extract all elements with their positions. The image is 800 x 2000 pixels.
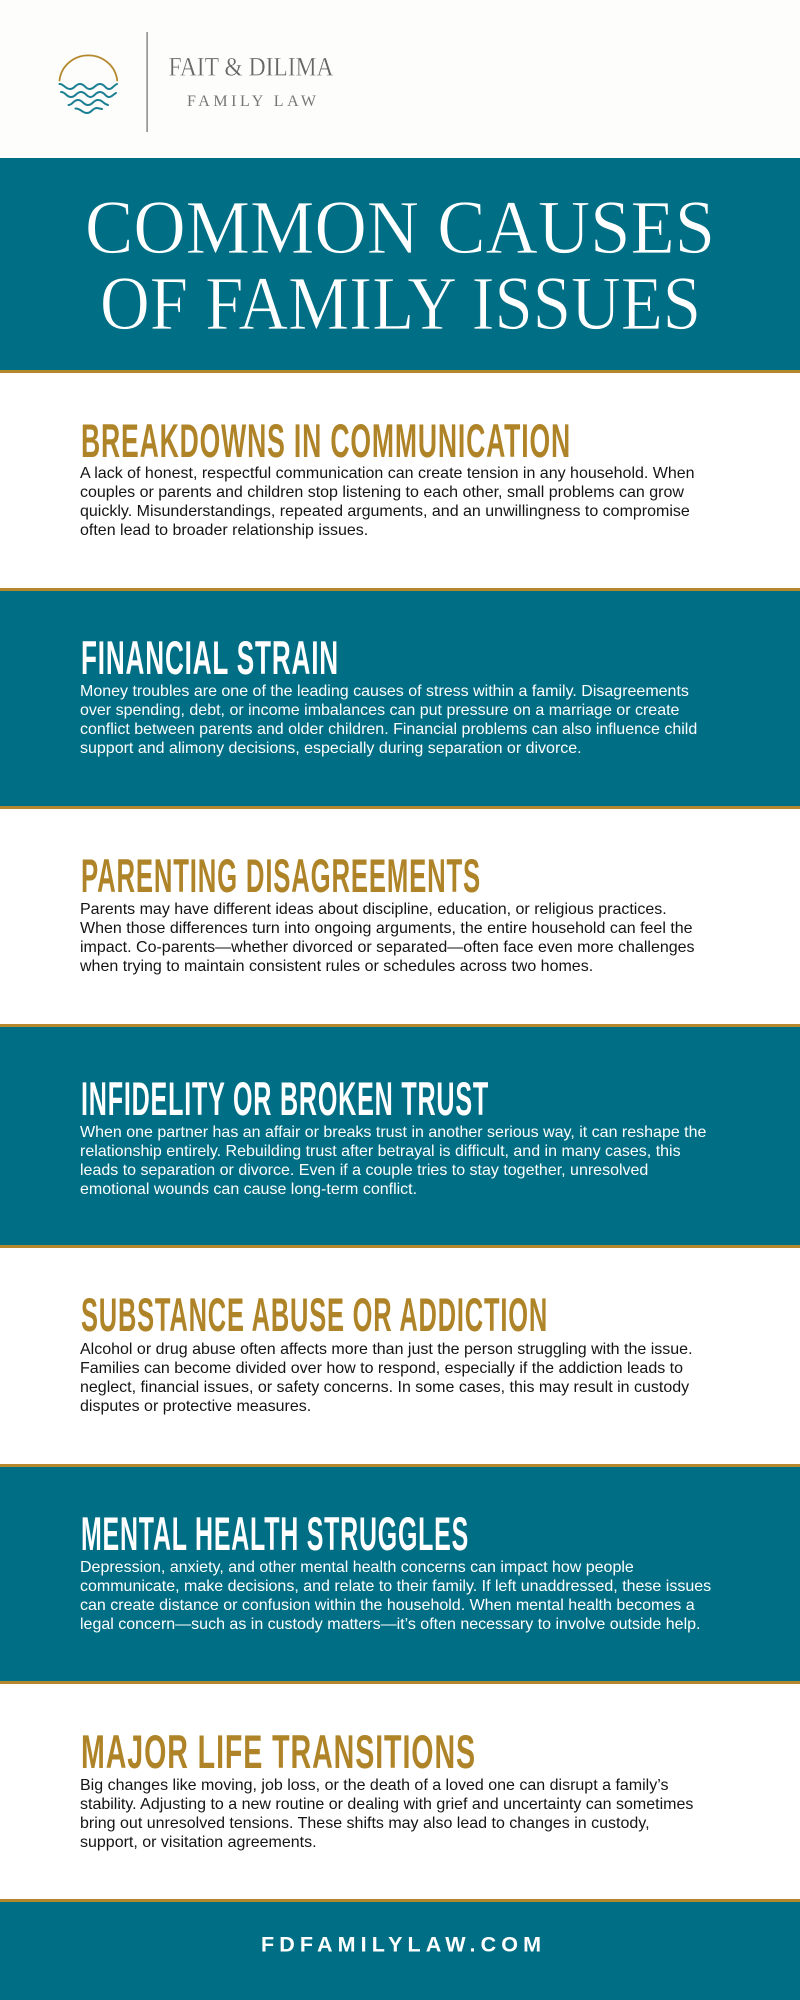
panel: infidelity or broken trust [0,1027,800,1248]
text block: Depression, anxiety, and other mental health concerns can impact how people [80,1559,634,1576]
text block: stability. Adjusting to a new routine or dealing with grief and uncertainty can sometimes [80,1796,693,1813]
text block: can create distance or confusion within the household. When mental health becomes a [80,1597,695,1614]
text block: neglect, financial issues, or safety concerns. In some cases, this may result in custody [80,1379,689,1396]
text block: couples or parents and children stop listening to each other, small problems can grow [80,484,684,501]
text block: relationship entirely. Rebuilding trust after betrayal is difficult, and in many cases, this [80,1143,681,1160]
panel: major life transitions [0,1684,800,1902]
logo tagline: FAMILY LAW [187,93,317,110]
text block: Alcohol or drug abuse often affects more than just the person struggling with the issue. [80,1341,693,1358]
footer url: FDFAMILYLAW.COM [261,1932,541,1956]
text block [80,1559,711,1633]
text block: conflict between parents and older children. Financial problems can also influence child [80,721,697,738]
heading: MENTAL HEALTH STRUGGLES [81,1507,469,1560]
text block [80,683,697,757]
header band [0,0,800,158]
text block [80,1777,693,1851]
panel: substance abuse or addiction [0,1248,800,1467]
text block: impact. Co-parents—whether divorced or separated—often face even more challenges [80,939,695,956]
text block [80,1124,707,1198]
title: OF FAMILY ISSUES [100,262,701,346]
text block: Money troubles are one of the leading causes of stress within a family. Disagreements [80,683,689,700]
panel: mental health struggles [0,1467,800,1684]
text block: A lack of honest, respectful communication can create tension in any household. When [80,465,695,482]
text block [80,465,695,539]
panel: parenting disagreements [0,809,800,1027]
text block: support and alimony decisions, especially during separation or divorce. [80,740,582,757]
text block: When those differences turn into ongoing arguments, the entire household can feel the [80,920,693,937]
footer band [0,1902,800,2000]
text block: legal concern—such as in custody matters—it’s often necessary to involve outside help. [80,1616,700,1633]
text block: emotional wounds can cause long-term conflict. [80,1181,417,1198]
title panel [0,158,800,373]
panel: breakdowns in communication [0,373,800,591]
panel: financial strain [0,591,800,809]
text block: disputes or protective measures. [80,1398,311,1415]
text block: often lead to broader relationship issues. [80,522,368,539]
heading: PARENTING DISAGREEMENTS [81,849,481,902]
logo wordmark: FAIT & DILIMA [168,52,334,82]
text block: over spending, debt, or income imbalances can put pressure on a marriage or create [80,702,680,719]
text block: Parents may have different ideas about discipline, education, or religious practices. [80,901,667,918]
text block: communicate, make decisions, and relate to their family. If left unaddressed, these issues [80,1578,711,1595]
heading: FINANCIAL STRAIN [81,631,339,684]
heading: MAJOR LIFE TRANSITIONS [81,1725,476,1778]
text block: When one partner has an affair or breaks trust in another serious way, it can reshape the [80,1124,707,1141]
text block: bring out unresolved tensions. These shifts may also lead to changes in custody, [80,1815,650,1832]
text block: when trying to maintain consistent rules or schedules across two homes. [79,958,593,975]
text block: Families can become divided over how to respond, especially if the addiction leads to [80,1360,683,1377]
text block [80,1341,693,1415]
text block: support, or visitation agreements. [80,1834,317,1851]
icon: sun and waves logo [60,55,117,113]
text block: quickly. Misunderstandings, repeated arguments, and an unwillingness to compromise [80,503,690,520]
text block: Big changes like moving, job loss, or the death of a loved one can disrupt a family’s [80,1777,668,1794]
title [85,186,715,346]
logo divider [146,32,148,132]
text block: leads to separation or divorce. Even if a couple tries to stay together, unresolved [80,1162,648,1179]
text block [79,901,695,975]
title: COMMON CAUSES [85,186,715,270]
